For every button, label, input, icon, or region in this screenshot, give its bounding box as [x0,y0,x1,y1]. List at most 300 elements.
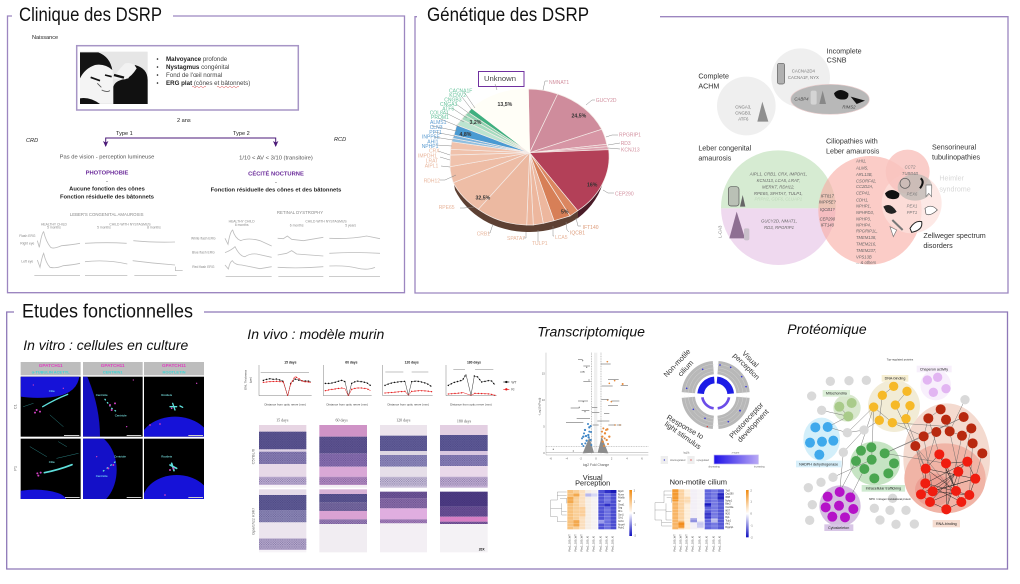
chart: circular enrichment plot: Visual [740,349,761,369]
group: Complete ACHM: ATF6 [738,117,749,122]
group: Ciliopathies with Leber amaurosis: TMEM216, [856,242,876,247]
pie labels: genes: CRX [429,148,440,154]
pie labels: genes: GUCY2D [596,98,617,104]
chart legend: KI [511,388,515,392]
chart: heatmap Non-motile cilium: Ift57 [725,509,731,512]
group: Complete ACHM: CNGB3, [735,110,751,115]
group: Ciliopathies with Leber amaurosis: ARL13B, [855,172,873,177]
chart: heatmap Visual Perception: Rgs9 [618,491,624,493]
group: Ciliopathies with Leber amaurosis: Ciliopathies with [826,137,878,145]
group: Ciliopathies with Leber amaurosis: CC2D2A, [856,184,874,189]
line charts: ONL thickness: (µm) [248,377,252,383]
group: Ciliopathies with Leber amaurosis: INPP5E? [819,200,837,205]
figure: immunofluorescence grid: Rootlets [161,393,173,397]
pie labels: genes: CEP290 [615,192,634,198]
chart: volcano plot: -Log10 (Padj) [538,398,542,416]
group: Leber congenital amaurosis: PRPH2, GDF6, CLUAP1 [755,197,803,202]
chart: ERG traces: White flash ERG [191,236,216,240]
labels: CRD and RCD: RCD [334,137,346,143]
figure: immunofluorescence grid: ROOTLETIN [162,369,186,374]
nodes: intracellular trafficking [851,442,899,483]
legend: circular plot: downregulated [670,459,686,462]
group: Zellweger, tubulinopathies, Heimler: Heimler [939,175,965,183]
group: Incomplete CSNB: CACNA1F, NYX [788,75,819,80]
bullet list: Malvoyance profonde [166,56,228,63]
chart: heatmap Non-motile cilium: Tulp1 [725,520,732,522]
histology columns [251,418,488,552]
group: Incomplete CSNB: Incomplete [827,47,862,55]
bullet list [157,56,250,88]
figure: mouse model [244,361,517,552]
group: Zellweger, tubulinopathies, Heimler: PEX1 [907,204,917,209]
chart: heatmap Non-motile cilium: Pbs2_180_WT [684,534,688,552]
heading: In vitro: In vitro : cellules en culture [23,338,188,353]
pie labels: genes: CRB1 [477,232,490,238]
pie labels: genes: LRAT [426,158,438,164]
group: Zellweger, tubulinopathies, Heimler: Sensorineural [932,143,977,151]
chart: volcano plot: 10 [542,398,545,402]
arrow: type branching [103,131,278,147]
cluster labels: Mitochondria [826,392,848,396]
figure: immunofluorescence grid: Cilia [49,389,55,393]
labels: CRD and RCD: CRD [26,138,38,144]
pie labels: genes: PROM1 [431,115,449,121]
group: Ciliopathies with Leber amaurosis: ALMS, [855,165,868,170]
figure: immunofluorescence grid: GPATCH11 [101,363,125,368]
chart: heatmap Non-motile cilium: -2 [750,535,753,539]
chart: circular enrichment plot: Response to [665,413,705,441]
group: Ciliopathies with Leber amaurosis: CSORF42, [856,179,876,184]
figure: immunofluorescence grid: Centriole [96,474,108,478]
group: Ciliopathies with Leber amaurosis: VPS13B [856,254,872,259]
group: Ciliopathies with Leber amaurosis: IFT817 [821,194,835,199]
group: Leber congenital amaurosis: GUCY2D, NMAT1, [761,219,797,224]
chart: heatmap Non-motile cilium: Ift88 [725,496,731,499]
histology columns: Gpatch11 KI/KI [251,507,256,535]
chart: heatmap Visual Perception: Pbs2_180_KI [598,535,602,552]
pie labels: genes: RDH12 [424,178,440,184]
chart: circular enrichment plot: cilium [676,358,695,378]
pie labels: genes: CACNA1F [449,88,472,94]
pie labels: genes: RPE65 [439,205,455,211]
chart: volcano plot: 0 [595,456,597,460]
figure: immunofluorescence grid: P1 [12,465,17,471]
figure: transcriptomics [538,347,771,552]
chart: protein interaction network: Top-regulated proteins [887,357,914,361]
chart: heatmap Visual Perception: Pbs2_180_WT [579,534,583,552]
line charts: ONL thickness: 180 days [467,361,481,365]
figure: immunofluorescence grid: Centriole [96,393,108,397]
chart: heatmap Non-motile cilium: Pbs2_180_KI [697,535,701,552]
group: Ciliopathies with Leber amaurosis: TMEM237, [856,248,876,253]
chart: heatmap Non-motile cilium: 0 [750,512,752,516]
text block: type 1 phenotype: PHOTOPHOBIE [86,170,128,176]
nodes: gray unassigned [804,376,970,529]
group: Leber congenital amaurosis: RD3, RPGRIP1 [764,225,795,230]
pie labels: percentages: 13,5% [498,102,513,108]
callout: Unknown: Unknown [484,74,516,83]
figure: immunofluorescence grid: Centriole [115,414,127,418]
chart: ERG traces: Right eye [20,241,35,245]
arrow: type branching: Type 2 [233,131,250,137]
chart: circular enrichment plot: Non-motile [662,347,692,379]
heading: Génétique des DSRP: Génétique des DSRP [427,4,589,26]
chart: heatmap Non-motile cilium [655,478,753,552]
chart: volcano plot: 15 [542,371,545,375]
group: Zellweger, tubulinopathies, Heimler: Zellweger spectrum [923,232,986,240]
group: Incomplete CSNB: RIMS2 [842,105,856,110]
pie labels: genes: INPP5E [422,134,440,140]
cluster labels: Chaperon activity [920,367,948,371]
chart: heatmap Visual Perception: Nrl [618,500,621,503]
group: Zellweger, tubulinopathies, Heimler: disorders [923,242,953,250]
pie chart: DSRP genes [418,80,641,247]
chart: heatmap Visual Perception: Prph2 [618,527,625,530]
group: Zellweger, tubulinopathies, Heimler: TUBB4B [902,171,918,176]
pie labels: genes: IQCB1 [570,230,585,236]
text block: type 1 phenotype: - [106,179,108,185]
chart: volcano plot: 0 [543,451,545,455]
group: Complete ACHM: ACHM [698,82,719,90]
chart legend: WT [511,380,517,384]
group: Zellweger, tubulinopathies, Heimler [882,143,986,250]
figure: immunofluorescence grid: GPATCH11 [162,363,186,368]
pie labels: percentages: 3,2% [470,120,482,126]
chart: heatmap Non-motile cilium: 2 [750,488,752,492]
legend: circular plot [661,452,765,468]
chart: volcano plot: 2 [611,456,613,460]
chart: heatmap Non-motile cilium: Pbs2_180_KI [691,535,695,552]
pie labels: genes: AIPL1 [425,164,439,170]
pie labels: percentages: 5% [561,210,569,216]
group: Ciliopathies with Leber amaurosis: CEP290 [820,217,836,222]
chart: ERG traces: CHILD WITH NYSTAGMUS [109,222,151,226]
chart: heatmap Visual Perception: 0 [634,511,636,515]
pie labels: genes: NMNAT1 [549,80,569,86]
pie labels: genes: AHI1 [427,140,439,146]
chart: ERG traces: 5 months [97,226,111,230]
group: Leber congenital amaurosis: RPE65, SPATA7, TULP1, [754,191,803,196]
chart: heatmap Visual Perception: Pbs2_180_KI [585,535,589,552]
chart: heatmap Non-motile cilium: Pbs2_180_KI [711,535,715,552]
histology columns: 15 days [276,418,289,423]
panel: Etudes fonctionnelles [3,300,1007,569]
chart: heatmap Visual Perception: Pbs2_180_WT [573,534,577,552]
chart: ERG traces: Blue flash ERG [192,251,215,255]
chart: ERG traces: 6 months [235,223,249,227]
chart: ERG traces: Left eye [21,259,33,263]
figure: immunofluorescence grid: α-TUBULIN ACETYL [32,369,70,374]
group: Ciliopathies with Leber amaurosis: IQCB1? [820,207,835,212]
chart: protein interaction network [796,357,990,531]
bullet list: Fond de l'œil normal [166,72,222,79]
chart: heatmap Visual Perception [551,473,637,552]
line charts: ONL thickness [244,361,517,406]
arrow: type branching: Type 1 [116,131,133,137]
text block: type 1 phenotype: Fonction résiduelle des bâtonnets [60,194,154,200]
chart: volcano plot: -6 [549,456,552,460]
text block: type 1 phenotype [60,154,154,200]
group: Zellweger, tubulinopathies, Heimler: PEX6 [907,191,918,196]
network edges [822,386,982,509]
pie labels: percentages [460,102,598,216]
text block: type 2 phenotype: - [275,180,277,186]
pie labels: genes: RPGRIP1 [619,132,641,138]
chart: heatmap Non-motile cilium: Ahi1 [725,523,731,526]
pie labels: genes: IMPDH1 [418,154,437,160]
chart: circular enrichment plot: light stimulus [663,419,703,451]
chart: ERG traces: 5 years [345,224,356,228]
chart: volcano plot: 6 [641,456,643,460]
line charts: ONL thickness: 120 days [405,361,419,365]
pie labels: genes: LCA5 [555,235,568,241]
cluster labels: Cytoskeleton [828,526,849,530]
pie labels: percentages: 32,5% [476,196,491,202]
group: Leber congenital amaurosis: Leber congenital [698,145,752,153]
legend: circular plot: decreasing [708,465,720,468]
group: Complete ACHM: CNGA3, [735,104,751,109]
chart: heatmap Non-motile cilium: Non-motile cilium [670,478,727,487]
pie labels: genes: ATF6 [442,106,454,112]
legend: circular plot: increasing [754,465,765,468]
group: Ciliopathies with Leber amaurosis: ... & others [856,260,876,265]
chart: heatmap Non-motile cilium: 1 [750,500,752,504]
cluster labels: MHC / mitogen translational protein [869,497,911,501]
line charts: ONL thickness: Distance from optic nerve (mm) [327,402,368,406]
pie labels: genes: SPATA7 [507,236,525,242]
chart: heatmap Non-motile cilium: Rpgrip1 [725,526,734,529]
chart: ERG traces: RETINAL DYSTROPHY [277,210,323,215]
chart: heatmap Visual Perception: -1 [634,522,637,526]
chart: heatmap Visual Perception: Pbs2_180_KI [610,535,614,552]
group: Ciliopathies with Leber amaurosis: AHI1, [855,158,866,163]
chart: circular enrichment plot: development [735,407,771,444]
chart: volcano plot: -2 [579,456,582,460]
chart: heatmap Visual Perception: Gnb1 [618,521,624,523]
group: Leber congenital amaurosis: KCNJ13, LCA5, LRAT, [757,178,800,183]
panel: Clinique des DSRP [8,4,404,293]
line charts: ONL thickness: ONL Thickness [244,369,248,390]
chart: heatmap Visual Perception: Perception [575,479,610,488]
chart: heatmap Non-motile cilium: Rp1 [725,517,730,519]
chart: heatmap Visual Perception: Rcvrn [618,493,625,496]
pie labels: percentages: 24,5% [572,114,587,120]
chart: heatmap Visual Perception: Pde6b [618,498,625,500]
figure: immunofluorescence grid: Cilia [49,460,55,464]
group: Incomplete CSNB [771,47,869,114]
line charts: ONL thickness: Distance from optic nerve (mm) [450,402,492,406]
pie labels: genes: TULP1 [532,241,548,247]
chart: heatmap Non-motile cilium: Ift20 [725,513,731,516]
bullet list: Nystagmus congénital [166,64,229,71]
pie labels: genes: PPT1 [429,130,442,136]
group: Leber congenital amaurosis: MERKT, RDH12, [762,185,795,190]
callout: Unknown [478,72,524,86]
nodes: dark red [910,404,987,458]
line charts: ONL thickness: 15 days [284,361,297,365]
chart: heatmap Non-motile cilium: Pbs2_180_KI [705,535,709,552]
panel: Génétique des DSRP [415,4,1008,293]
group: Ciliopathies with Leber amaurosis: RPGRIP1L, [856,229,878,234]
box: birth symptoms [77,46,298,110]
group: Ciliopathies with Leber amaurosis: NPHPD3, [856,210,874,215]
figure: immunofluorescence grid: C1 [12,403,17,409]
group: Zellweger, tubulinopathies, Heimler: syndrome [939,185,971,193]
chart: heatmap Visual Perception: Pbs2_180_KI [591,535,595,552]
chart: heatmap Visual Perception: 2 [634,488,636,492]
chart: heatmap Non-motile cilium: Bbs2 [725,504,731,506]
pie labels: genes: CNGB3 [444,98,462,104]
chart: heatmap Visual Perception: Rho [618,511,623,513]
chart: volcano plot [538,353,648,467]
figure: immunofluorescence grid [3,362,211,528]
chart: ERG traces: HEALTHY CHILD [229,220,255,224]
group: Ciliopathies with Leber amaurosis: Leber amaurosis [826,147,880,155]
group: Ciliopathies with Leber amaurosis [818,137,922,265]
chart: volcano plot: 4 [626,456,628,460]
chart: heatmap Visual Perception: Opn1 [618,514,624,516]
pie leader lines [432,81,620,242]
legend: circular plot: z-score [732,452,740,455]
pie labels: genes: CNGA3 [440,102,457,108]
heading: Etudes fonctionnelles: Etudes fonctionnelles [22,300,193,322]
group: Leber congenital amaurosis: amaurosis [698,155,732,163]
pie labels: percentages: 16% [587,182,598,188]
group: Ciliopathies with Leber amaurosis: TMEM138, [856,235,876,240]
group: Ciliopathies with Leber amaurosis: NPHP4, [856,222,871,227]
pie labels: genes: IFT140 [583,225,599,231]
group: Leber congenital amaurosis [698,145,836,265]
cluster labels: RNA-binding [936,522,957,526]
chart: heatmap Visual Perception: Visual [583,473,603,482]
group: Incomplete CSNB: CABP4 [794,97,809,102]
label: Naissance: Naissance [32,35,58,41]
group: Ciliopathies with Leber amaurosis: CEP41, [856,191,870,196]
chart: heatmap Visual Perception: 1 [634,500,636,504]
pie labels: genes: RD3 [621,141,631,147]
pie labels: genes: NPHP1 [422,144,439,150]
cluster backgrounds [803,370,990,527]
chart: heatmap Visual Perception: Pbs2_180_WT [567,534,571,552]
chart: heatmap Visual Perception: Pbs2_180_KI [604,535,608,552]
histology columns: 180 days [457,418,472,423]
labels: CRD and RCD [26,137,346,144]
nodes: mitochondria [834,398,857,421]
legend: circular plot: log2fc [683,452,690,454]
pie labels: genes: KCNV2 [449,93,466,99]
chart: circular enrichment plot [662,347,771,451]
chart: volcano plot: 5 [543,425,545,429]
group: Zellweger, tubulinopathies, Heimler: tubulinopathies [932,153,981,161]
histology columns: 60 days [336,418,348,423]
diagram: disease overlap Venn [698,47,986,265]
chart: heatmap Visual Perception: Sag [618,508,623,510]
group: Ciliopathies with Leber amaurosis: NPHP3, [856,216,871,221]
chart: ERG traces: CHILD WITH NYSTAGMUS [305,220,347,224]
cluster labels: Intracellular trafficking [866,487,901,491]
group: Ciliopathies with Leber amaurosis: IFT140 [821,223,835,228]
chart: ERG traces [19,210,380,277]
text block: type 2 phenotype: 1/10 < AV < 3/10 (transitoire) [239,156,313,162]
group: Complete ACHM: Complete [698,72,729,80]
group: Incomplete CSNB: CSNB [827,57,847,65]
histology columns: 120 days [396,418,411,423]
histology columns: C57BL/6 [251,448,256,464]
heading: Protéomique: Protéomique [787,322,867,337]
pie labels: percentages: 4,8% [460,132,472,138]
chart: volcano plot: -4 [565,456,568,460]
chart: circular enrichment plot: perception [731,351,762,382]
pie labels: genes: COL8A1 [430,110,449,116]
group: Zellweger, tubulinopathies, Heimler: CCT2 [905,165,916,170]
line charts: ONL thickness: Distance from optic nerve (mm) [265,402,306,406]
chart: heatmap Visual Perception: Crb1 [618,517,624,520]
text block: type 1 phenotype: Pas de vision - perception lumineuse [60,154,154,160]
figure: immunofluorescence grid: Centriole [114,455,126,459]
chart: heatmap Non-motile cilium: Pbs2_180_KI [718,535,722,552]
figure: immunofluorescence grid: Rootlets [161,455,173,459]
histology columns: 20X [479,548,485,552]
chart: ERG traces: HEALTHY CHILD [41,222,68,226]
nodes: chaperon activity [923,373,951,397]
text block: type 1 phenotype: Aucune fonction des cônes [69,186,145,192]
pie labels: genes: KCNJ13 [621,148,640,154]
legend: circular plot: upregulated [697,459,710,462]
group: Leber congenital amaurosis: L-CA3 [718,225,723,238]
chart: heatmap Non-motile cilium: Pbs2_180_WT [672,534,676,552]
chart: heatmap Non-motile cilium: Nphp1 [725,500,733,502]
cluster labels: NADPH dehydrogenase [799,462,838,466]
figure: immunofluorescence grid: GPATCH11 [39,363,63,368]
chart: ERG traces: 6 months [290,224,304,228]
pie labels: genes: ALMS1 [430,120,447,126]
chart: heatmap Visual Perception: Gnat1 [618,503,625,506]
heading: Clinique des DSRP: Clinique des DSRP [19,4,162,26]
group: Complete ACHM [698,72,776,135]
chart: ERG traces: LEBER'S CONGENITAL AMAUROSIS [70,212,144,217]
line charts: ONL thickness: 60 days [345,361,358,365]
text block: type 2 phenotype [211,156,341,194]
heading: In vivo: In vivo : modèle murin [247,327,384,342]
chart: ERG traces: 8 months [147,226,161,230]
group: Ciliopathies with Leber amaurosis: CDH1, [856,197,868,202]
heading: Transcriptomique: Transcriptomique [537,325,645,340]
cluster labels [796,366,960,531]
chart: ERG traces: Flash ERG [19,234,36,238]
chart: ERG traces: 5 months [47,226,61,230]
chart: heatmap Non-motile cilium: Ttc8 [725,489,731,492]
chart: heatmap Non-motile cilium: Cc2d2a [725,507,734,509]
chart: heatmap Visual Perception: -2 [634,534,637,538]
text block: type 2 phenotype: Fonction résiduelle des cônes et des bâtonnets [211,188,341,194]
cluster labels: DNA-binding [885,377,905,381]
group: Incomplete CSNB: CACNA2D4 [792,68,815,73]
text block: type 2 phenotype: CÉCITÉ NOCTURNE [248,170,304,178]
line charts: ONL thickness: Distance from optic nerve (mm) [388,402,429,406]
pie labels: genes [418,80,641,247]
group: Zellweger, tubulinopathies, Heimler: PPT1 [907,210,917,215]
chart: heatmap Visual Perception: Abca4 [618,523,625,526]
nodes: DNA-binding [869,382,915,427]
group: Ciliopathies with Leber amaurosis: NPHP1, [856,204,871,209]
nodes: NADPH dehydrogenase [805,422,838,460]
group: Leber congenital amaurosis: AIPL1, CRB1, CRX, IMPDH1, [749,171,807,176]
chart: heatmap Non-motile cilium: Cep290 [725,494,734,496]
chart legend [503,380,517,392]
pie labels: genes: CLN3 [430,125,443,131]
chart: ERG traces: Red flash ERG [192,265,215,269]
chart: circular enrichment plot: Photoreceptor [727,400,766,440]
